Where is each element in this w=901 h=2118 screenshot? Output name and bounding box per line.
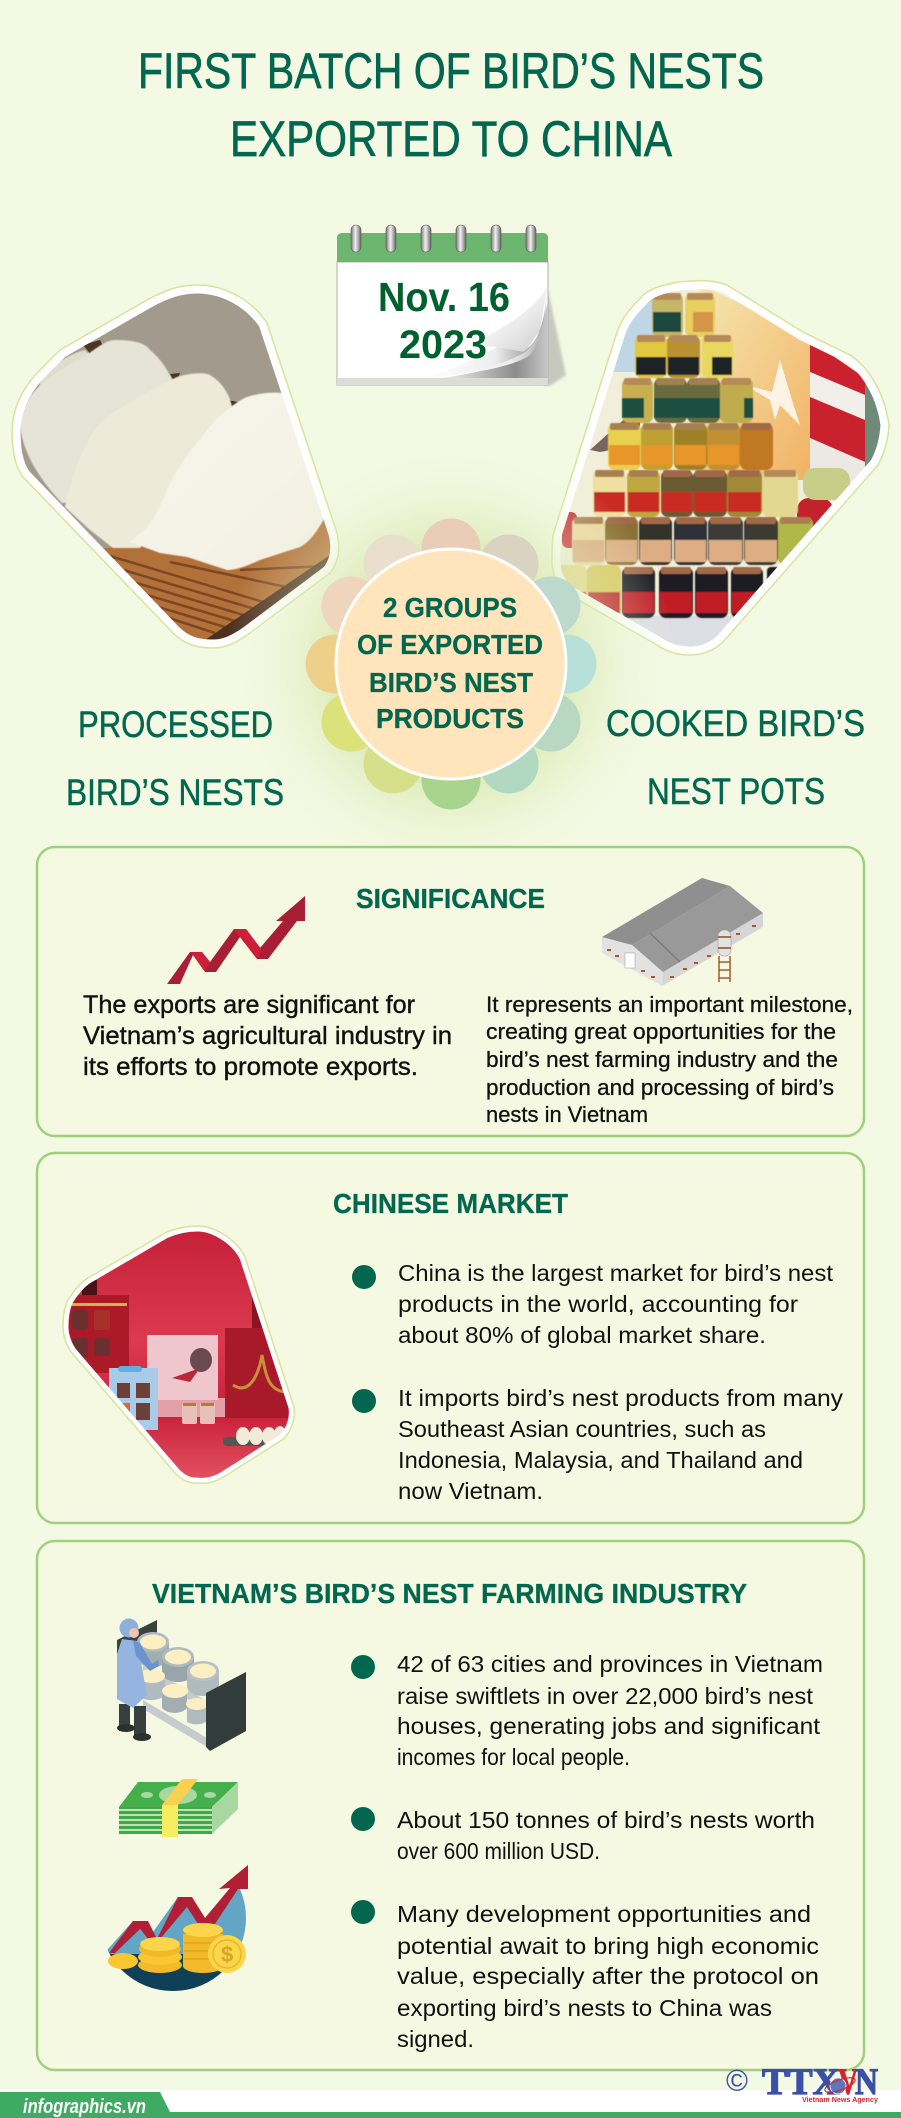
- text: important milestone: bird’s nest farming industry and the: [486, 1047, 838, 1072]
- footer bar: [0, 2090, 901, 2118]
- bullet text: tonnes and value: over 600 million USD.: [397, 1838, 600, 1864]
- bullet text: development opportunities: signed.: [397, 2026, 474, 2052]
- icon: farm warehouse: [602, 878, 763, 986]
- photo: cooked bird's nest pots: [545, 275, 890, 661]
- icon: coins and rising arrow: $: [221, 1942, 233, 1967]
- bullet text: cities and provinces: houses, generating jobs and significant: [397, 1713, 820, 1739]
- bullet text: development opportunities: exporting bird’s nests to China was: [397, 1995, 772, 2021]
- label: processed bird's nests: BIRD’S NESTS: [66, 772, 284, 813]
- jars row 4: [608, 423, 773, 470]
- logo: TTXVN Vietnam News Agency: Vietnam News Agency: [802, 2095, 879, 2104]
- bullet text: cities and provinces: [351, 1651, 823, 1770]
- jars row 1: [652, 293, 715, 337]
- text: exports significance: its efforts to promote exports.: [83, 1053, 418, 1081]
- heading: farming industry: VIETNAM’S BIRD’S NEST FARMING INDUSTRY: [152, 1578, 747, 1609]
- label: processed bird's nests: [66, 704, 284, 813]
- icon: stack of money: [119, 1779, 238, 1837]
- jars row 6: [572, 517, 813, 565]
- footer bar: infographics.vn: [23, 2096, 146, 2118]
- icon: calendar with date: Nov. 16: [378, 274, 510, 320]
- photo: processed bird's nests: [0, 280, 345, 660]
- icon: calendar with date: [337, 225, 566, 386]
- heading: chinese market: CHINESE MARKET: [333, 1188, 568, 1219]
- flower badge: 2 groups of exported products: OF EXPORTED: [357, 629, 543, 660]
- bullet text: development opportunities: Many development opportunities and: [397, 1901, 811, 1927]
- heading: significance: SIGNIFICANCE: [356, 883, 545, 914]
- jars row 7: [552, 565, 783, 618]
- label: cooked bird's nest pots: [606, 703, 865, 812]
- label: cooked bird's nest pots: NEST POTS: [647, 771, 825, 812]
- bullet text: largest market: China is the largest market for bird’s nest: [398, 1260, 833, 1286]
- flower badge: 2 groups of exported products: [226, 439, 676, 889]
- bullet text: tonnes and value: [351, 1807, 815, 1864]
- text: important milestone: creating great opportunities for the: [486, 1019, 836, 1044]
- logo: TTXVN Vietnam News Agency: [726, 2062, 879, 2104]
- jars row 5: [593, 470, 798, 517]
- bullet text: imports: Indonesia, Malaysia, and Thailand and: [398, 1447, 803, 1473]
- bullet text: cities and provinces: raise swiftlets in over 22,000 bird’s nest: [397, 1683, 813, 1709]
- panel: farming industry: [37, 1541, 864, 2070]
- bullet text: imports: Southeast Asian countries, such as: [398, 1416, 766, 1442]
- text: exports significance: The exports are significant for: [83, 991, 415, 1019]
- bullet text: largest market: about 80% of global market share.: [398, 1322, 766, 1348]
- jars row 2: [635, 335, 733, 378]
- text: important milestone: [486, 992, 853, 1127]
- text: exports significance: Vietnam’s agricultural industry in: [83, 1022, 452, 1050]
- bullet text: imports: It imports bird’s nest products from many: [398, 1385, 843, 1411]
- text: exports significance: [83, 991, 452, 1081]
- bullet text: largest market: [352, 1260, 833, 1348]
- text: important milestone: nests in Vietnam: [486, 1102, 648, 1127]
- logo: TTXVN Vietnam News Agency: V: [838, 2062, 858, 2103]
- logo: TTXVN Vietnam News Agency: TTX: [762, 2062, 840, 2103]
- icon: calendar with date: 2023: [399, 323, 487, 367]
- bullet text: cities and provinces: 42 of 63 cities and provinces in Vietnam: [397, 1651, 823, 1677]
- bullet text: imports: now Vietnam.: [398, 1478, 543, 1504]
- text: important milestone: production and processing of bird’s: [486, 1075, 834, 1100]
- icon: rising red arrow: [167, 896, 305, 984]
- bullet text: development opportunities: value, especially after the protocol on: [397, 1963, 819, 1989]
- flower badge: 2 groups of exported products: 2 GROUPS: [383, 592, 517, 623]
- logo: TTXVN Vietnam News Agency: N: [855, 2062, 878, 2103]
- panel: significance: [37, 847, 864, 1136]
- bullet text: development opportunities: potential await to bring high economic: [397, 1933, 819, 1959]
- title: EXPORTED TO CHINA: [230, 111, 673, 167]
- label: cooked bird's nest pots: COOKED BIRD’S: [606, 703, 865, 744]
- bullet text: cities and provinces: incomes for local people.: [397, 1744, 630, 1770]
- bullet text: development opportunities: [351, 1900, 819, 2052]
- bullet text: imports: [352, 1385, 843, 1504]
- flower badge: 2 groups of exported products: BIRD’S NEST: [369, 667, 533, 698]
- photo: red gift boxes: [62, 1225, 296, 1484]
- icon: worker with nest trays: [117, 1618, 246, 1751]
- label: processed bird's nests: PROCESSED: [78, 704, 273, 745]
- bullet text: tonnes and value: About 150 tonnes of bird’s nests worth: [397, 1807, 815, 1833]
- icon: coins and rising arrow: [100, 1865, 250, 1995]
- logo: TTXVN Vietnam News Agency: ©: [726, 2063, 748, 2098]
- bullet text: largest market: products in the world, accounting for: [398, 1291, 798, 1317]
- text: important milestone: It represents an important milestone,: [486, 992, 853, 1017]
- panel: chinese market: [37, 1153, 864, 1523]
- jars row 3: [622, 378, 753, 423]
- flower badge: 2 groups of exported products: PRODUCTS: [376, 703, 524, 734]
- title: [138, 43, 764, 167]
- title: FIRST BATCH OF BIRD’S NESTS: [138, 43, 764, 99]
